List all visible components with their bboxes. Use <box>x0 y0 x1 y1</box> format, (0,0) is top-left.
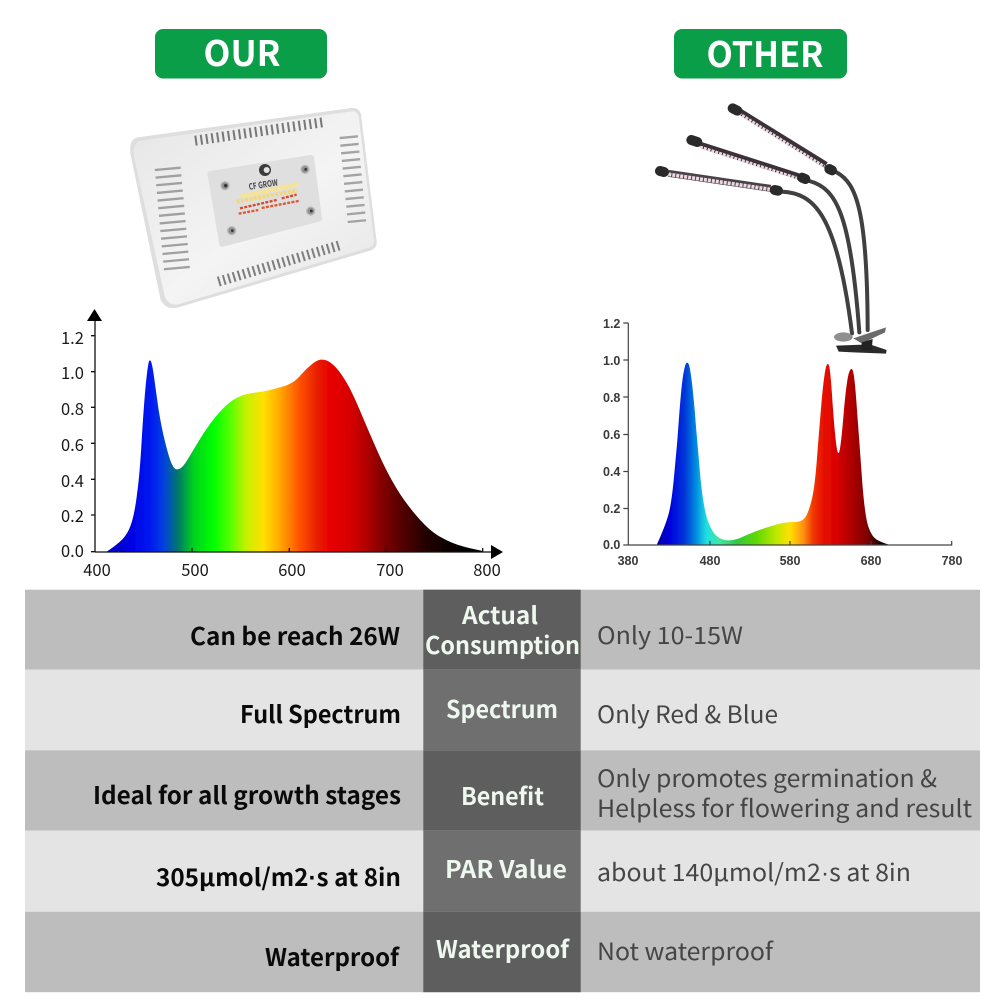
badge: OTHER <box>674 27 847 78</box>
our x-axis labels <box>83 557 501 581</box>
panel body <box>130 108 377 308</box>
our x-axis labels: 500 <box>181 557 209 581</box>
other values: Only Red & Blue <box>597 695 778 730</box>
other values: Not waterproof <box>597 932 774 967</box>
our values: 305μmol/m2·s at 8in <box>156 858 401 893</box>
our y-axis labels: 1.0 <box>61 360 84 384</box>
right vents <box>349 136 357 226</box>
our values: Ideal for all growth stages <box>93 776 401 811</box>
product photo: other clip lamp <box>660 108 887 354</box>
end caps and collars <box>660 108 832 191</box>
other x-axis labels: 680 <box>861 554 881 568</box>
left vents <box>168 168 177 274</box>
our y-axis labels <box>61 325 84 562</box>
our axes <box>87 309 503 559</box>
other x-axis labels: 480 <box>700 554 720 568</box>
badge: OUR <box>155 26 327 78</box>
our x-axis labels: 600 <box>278 557 306 581</box>
our y-axis labels: 0.6 <box>61 432 84 456</box>
feature names <box>425 596 580 965</box>
other y-axis labels <box>603 317 620 552</box>
our values: Full Spectrum <box>240 695 401 730</box>
other y-axis labels: 0.0 <box>603 538 620 552</box>
other x-axis labels: 580 <box>780 554 800 568</box>
top vents <box>195 122 325 141</box>
row backgrounds <box>25 590 980 992</box>
our x-axis labels: 800 <box>473 557 501 581</box>
LED rows <box>237 184 300 214</box>
other x-axis labels <box>618 554 962 568</box>
our x-axis labels: 400 <box>83 557 111 581</box>
other values: Only promotes germination & <box>597 759 937 794</box>
other values: about 140μmol/m2 ·s at 8in <box>597 853 911 888</box>
screws <box>221 165 315 235</box>
our y-axis labels: 0.8 <box>61 396 84 420</box>
our y-axis labels: 0.4 <box>61 468 84 492</box>
our values: Can be reach 26W <box>190 617 400 652</box>
feature names: Actual <box>461 596 538 631</box>
other x-axis labels: 780 <box>942 554 962 568</box>
bottom vents <box>218 245 341 282</box>
other x-axis labels: 380 <box>618 554 638 568</box>
product photo: our panel light <box>130 108 377 308</box>
other y-axis labels: 1.2 <box>603 317 620 331</box>
other values: Helpless for flowering and result <box>597 789 972 824</box>
other y-axis labels: 0.4 <box>603 465 620 479</box>
goosenecks <box>782 172 868 333</box>
chart: our spectrum <box>61 309 503 581</box>
feature names: Consumption <box>425 626 580 661</box>
other values <box>597 616 972 967</box>
logo <box>248 164 279 193</box>
our y-axis labels: 0.0 <box>61 538 84 562</box>
logo: CF GROW <box>248 176 279 193</box>
other spectrum curve <box>657 363 890 545</box>
other values: Only 10-15W <box>597 616 743 651</box>
other y-axis labels: 0.8 <box>603 391 620 405</box>
other y-axis labels: 1.0 <box>603 354 620 368</box>
feature names: Benefit <box>461 777 544 812</box>
our y-axis labels: 1.2 <box>61 325 84 349</box>
other axes <box>623 323 952 545</box>
comparison table <box>25 590 980 992</box>
feature names: PAR Value <box>445 850 567 885</box>
our y-axis labels: 0.2 <box>61 503 84 527</box>
our spectrum curve <box>107 360 483 552</box>
badge: OUR: OUR <box>204 26 281 77</box>
light bars <box>668 112 826 189</box>
our values <box>93 617 401 973</box>
LED plate <box>207 155 322 247</box>
our values: Waterproof <box>265 938 400 973</box>
badge: OTHER: OTHER <box>706 27 824 78</box>
feature names: Waterproof <box>436 930 570 965</box>
feature names: Spectrum <box>446 690 558 725</box>
chart: other spectrum <box>603 317 962 568</box>
our x-axis labels: 700 <box>376 557 404 581</box>
other y-axis labels: 0.2 <box>603 502 620 516</box>
other y-axis labels: 0.6 <box>603 428 620 442</box>
clip <box>834 327 887 354</box>
center column <box>423 590 581 992</box>
